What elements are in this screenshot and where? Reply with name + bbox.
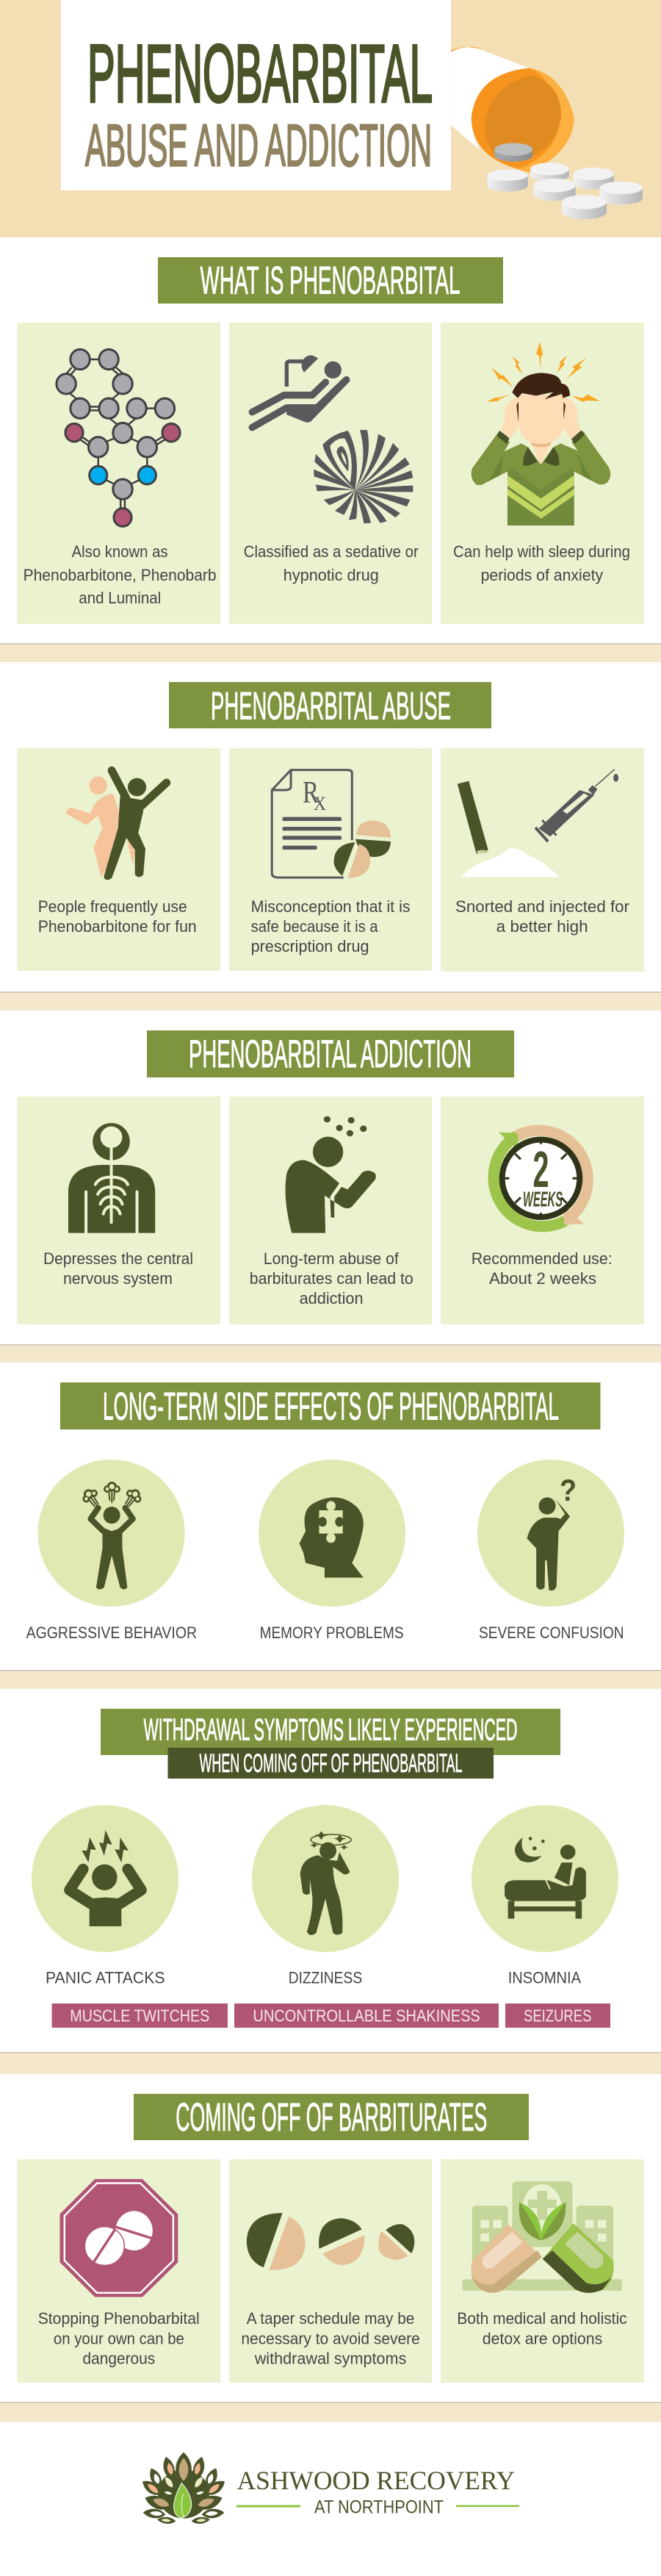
icon: molecule [57, 349, 180, 526]
caption: addiction [300, 1289, 364, 1307]
icon: man with headache [472, 342, 610, 525]
heading: what is phenobarbital [158, 257, 503, 304]
caption: a better high [496, 917, 588, 936]
caption [455, 897, 629, 936]
caption: Phenobarbitone, Phenobarb [24, 566, 217, 584]
icon: peacock leaf mark [140, 2453, 228, 2525]
caption [241, 2309, 420, 2367]
icon: dizzy figure [300, 1831, 351, 1935]
label: MEMORY PROBLEMS [260, 1624, 404, 1642]
caption: periods of anxiety [481, 566, 603, 584]
icon: shrinking pills [247, 2213, 414, 2270]
caption [251, 897, 411, 955]
icon: head with puzzle piece [300, 1497, 364, 1578]
panel: used for fun [18, 748, 220, 971]
panel: also known as [18, 323, 220, 624]
divider band [0, 2402, 661, 2422]
tag: muscle twitches: MUSCLE TWITCHES [70, 2006, 209, 2026]
icon: sleepless in bed [505, 1837, 586, 1919]
item: insomnia [472, 1805, 618, 1987]
panel: recommended use [441, 1097, 644, 1324]
tag: seizures [505, 2003, 610, 2028]
icon: prescription and pills [272, 770, 391, 878]
icon: two week clock [494, 1130, 588, 1227]
caption: barbiturates can lead to [250, 1269, 413, 1288]
icon: dancing figures [65, 770, 167, 880]
section: phenobarbital abuse [18, 682, 644, 972]
caption: Misconception that it is [251, 897, 411, 916]
caption [457, 2309, 627, 2348]
panel: misconception [229, 748, 432, 971]
caption: Snorted and injected for [455, 897, 629, 916]
icon: two week clock: 2 [533, 1141, 549, 1198]
caption [250, 1249, 413, 1307]
panel: medical and holistic detox [441, 2159, 644, 2383]
item: memory problems [259, 1460, 405, 1642]
label: AGGRESSIVE BEHAVIOR [26, 1624, 197, 1642]
section: long-term side effects [26, 1382, 624, 1642]
icon: capsules, leaves and hospital [463, 2181, 622, 2293]
tag: uncontrollable shakiness: UNCONTROLLABLE SHAKINESS [253, 2006, 480, 2026]
divider band [0, 643, 661, 662]
caption: Recommended use: [472, 1249, 613, 1268]
caption: Stopping Phenobarbital [38, 2309, 200, 2328]
caption: About 2 weeks [489, 1269, 596, 1288]
tagline: AT NORTHPOINT [314, 2497, 444, 2517]
heading: phenobarbital abuse: PHENOBARBITAL ABUSE [211, 685, 451, 728]
panel: stopping on your own [18, 2159, 220, 2383]
item: panic attacks [32, 1805, 178, 1987]
divider band [0, 1670, 661, 1689]
heading: coming off of barbiturates [134, 2094, 529, 2140]
icon: confused figure: ? [560, 1473, 577, 1507]
caption: hypnotic drug [283, 566, 379, 584]
caption: People frequently use [38, 897, 187, 916]
icon: nervous system body [68, 1123, 155, 1233]
panel: central nervous system [18, 1097, 220, 1324]
section: coming off of barbiturates [18, 2094, 644, 2383]
item: severe confusion [477, 1460, 624, 1642]
header banner [0, 0, 661, 237]
section: phenobarbital addiction [18, 1030, 644, 1324]
icon: stop sign with pills [60, 2179, 178, 2297]
title panel [61, 0, 451, 190]
caption: necessary to avoid severe [241, 2330, 420, 2348]
caption: A taper schedule may be [247, 2309, 414, 2328]
divider band [0, 991, 661, 1011]
section: what is phenobarbital [18, 257, 644, 624]
caption [43, 1249, 193, 1288]
panel: snorted and injected [441, 748, 644, 972]
panel: sleep during anxiety [441, 323, 644, 624]
item: dizziness [252, 1805, 399, 1987]
caption [24, 542, 217, 607]
panel: long-term abuse [229, 1097, 432, 1324]
icon: panicked figure [70, 1830, 141, 1926]
panel: classified as sedative [229, 323, 432, 624]
caption [472, 1249, 613, 1288]
subheading: when coming off [167, 1748, 494, 1779]
icon: hypnotic spiral [314, 430, 413, 523]
tag: muscle twitches [52, 2003, 228, 2028]
wordmark: ASHWOOD RECOVERY [237, 2466, 515, 2495]
icon: dizzy stooped figure [286, 1116, 376, 1233]
caption [38, 2309, 200, 2367]
divider band [0, 2052, 661, 2074]
caption: Long-term abuse of [264, 1249, 400, 1268]
label: SEVERE CONFUSION [479, 1624, 624, 1642]
divider band [0, 1344, 661, 1363]
caption [244, 542, 419, 584]
label: INSOMNIA [508, 1969, 581, 1987]
caption [38, 897, 197, 936]
item: aggressive behavior [26, 1460, 197, 1642]
icon: two week clock: WEEKS [523, 1188, 563, 1212]
caption: safe because it is a [251, 917, 378, 936]
icon: spilled pill bottle [451, 47, 643, 219]
caption: dangerous [82, 2349, 155, 2367]
heading: withdrawal symptoms [101, 1709, 560, 1755]
caption: detox are options [483, 2330, 602, 2348]
caption: prescription drug [251, 937, 369, 955]
caption: Phenobarbitone for fun [38, 917, 197, 936]
icon: angry figure [79, 1482, 145, 1589]
section: withdrawal symptoms [32, 1709, 618, 2028]
caption: Classified as a sedative or [244, 542, 419, 561]
heading: phenobarbital addiction [147, 1030, 514, 1077]
caption: withdrawal symptoms [254, 2349, 406, 2367]
caption: and Luminal [79, 589, 161, 607]
caption: on your own can be [54, 2330, 184, 2348]
caption: Can help with sleep during [453, 542, 630, 561]
caption: Also known as [72, 542, 168, 561]
label: PANIC ATTACKS [46, 1969, 165, 1987]
logo: ashwood recovery [140, 2453, 519, 2525]
icon: reclining patient [252, 355, 350, 428]
label: DIZZINESS [289, 1969, 362, 1987]
caption: nervous system [63, 1269, 173, 1288]
icon: confused figure [527, 1473, 577, 1590]
icon: prescription and pills: X [314, 793, 326, 814]
caption: Depresses the central [43, 1249, 193, 1268]
tag: seizures: SEIZURES [524, 2006, 591, 2026]
caption: Both medical and holistic [457, 2309, 627, 2328]
icon: straw, powder and syringe [458, 769, 618, 877]
heading: phenobarbital abuse [169, 682, 491, 728]
caption [453, 542, 630, 584]
panel: taper schedule [229, 2159, 432, 2383]
icon: prescription and pills: R [303, 776, 319, 810]
